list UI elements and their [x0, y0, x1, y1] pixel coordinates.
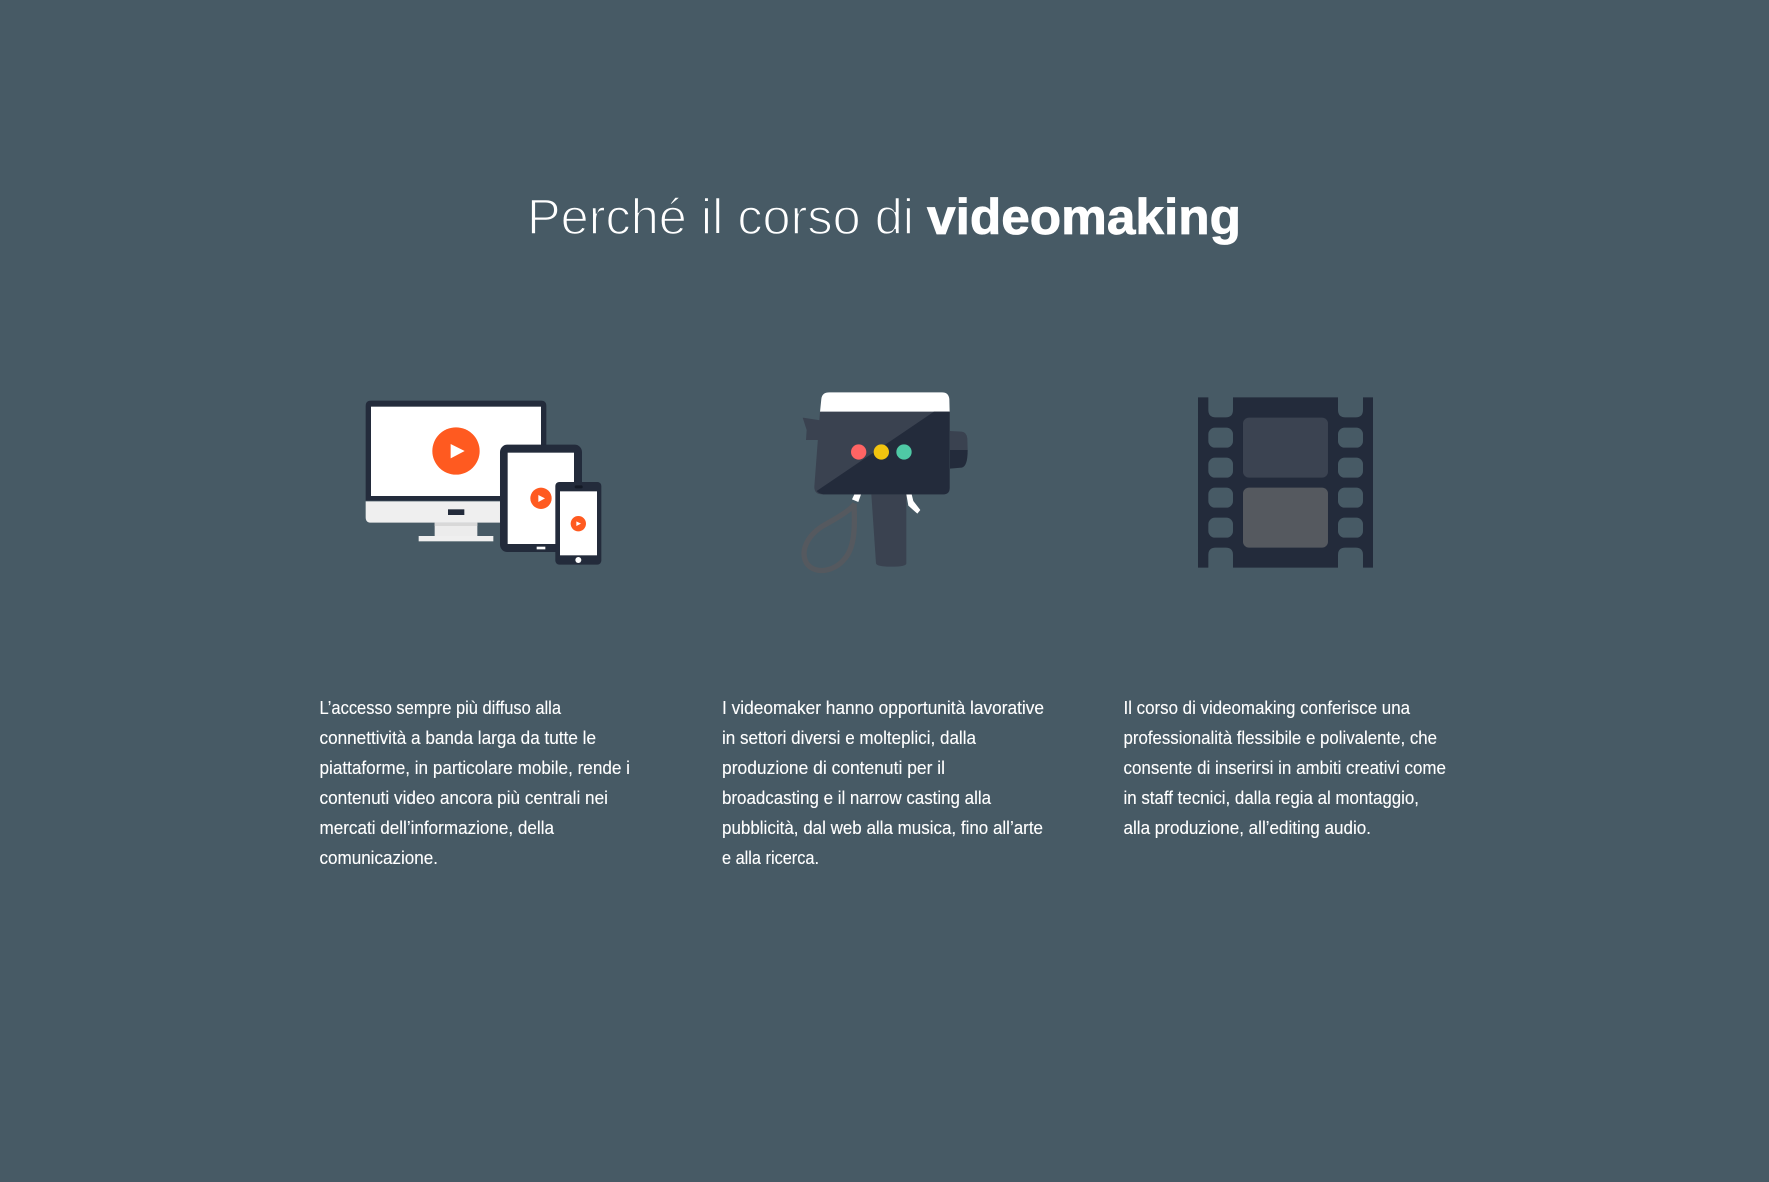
wrist strap: [804, 503, 855, 570]
indicator lights: [851, 444, 912, 460]
text block: column 2: produzione di contenuti per il: [722, 758, 945, 778]
text block: column 1: [320, 698, 630, 868]
text block: column 2: pubblicità, dal web alla musica, fino all’arte: [722, 818, 1043, 838]
handle: [871, 494, 906, 567]
text block: column 3: professionalità flessibile e polivalente, che: [1124, 728, 1437, 748]
phone: [555, 482, 601, 565]
text block: column 2: in settori diversi e molteplici, dalla: [722, 728, 977, 748]
text block: column 1: piattaforme, in particolare mobile, rende i: [320, 758, 630, 778]
trigger: [906, 494, 920, 514]
tablet: [500, 445, 582, 552]
text block: column 3: [1124, 698, 1446, 838]
camera body: [814, 412, 950, 494]
icon: responsive devices with play buttons: [366, 401, 601, 565]
text block: column 2: e alla ricerca.: [722, 848, 819, 868]
text block: column 2: broadcasting e il narrow casting alla: [722, 788, 992, 808]
lower frame: [1243, 488, 1328, 548]
lens: [950, 431, 968, 469]
text block: column 3: Il corso di videomaking conferisce una: [1124, 698, 1411, 718]
text block: column 2: [722, 698, 1044, 868]
viewfinder: [803, 418, 821, 440]
title: videomaking: [927, 189, 1241, 245]
title: Perché il corso di: [527, 189, 914, 245]
icon: film strip: [1198, 397, 1373, 568]
text block: column 1: comunicazione.: [320, 848, 438, 868]
text block: column 1: connettività a banda larga da tutte le: [320, 728, 596, 748]
text block: column 3: in staff tecnici, dalla regia al montaggio,: [1124, 788, 1419, 808]
monitor: [366, 401, 546, 541]
text block: column 3: consente di inserirsi in ambiti creativi come: [1124, 758, 1446, 778]
text block: column 1: mercati dell’informazione, della: [320, 818, 555, 838]
icon: video camera: [803, 392, 968, 570]
upper frame: [1243, 418, 1328, 478]
white clip left: [852, 494, 861, 502]
title: [527, 189, 1241, 245]
text block: column 2: I videomaker hanno opportunità lavorative: [722, 698, 1044, 718]
text block: column 3: alla produzione, all’editing audio.: [1124, 818, 1371, 838]
text block: column 1: contenuti video ancora più centrali nei: [320, 788, 608, 808]
camera top: [820, 392, 950, 412]
text block: column 1: L’accesso sempre più diffuso alla: [320, 698, 562, 718]
